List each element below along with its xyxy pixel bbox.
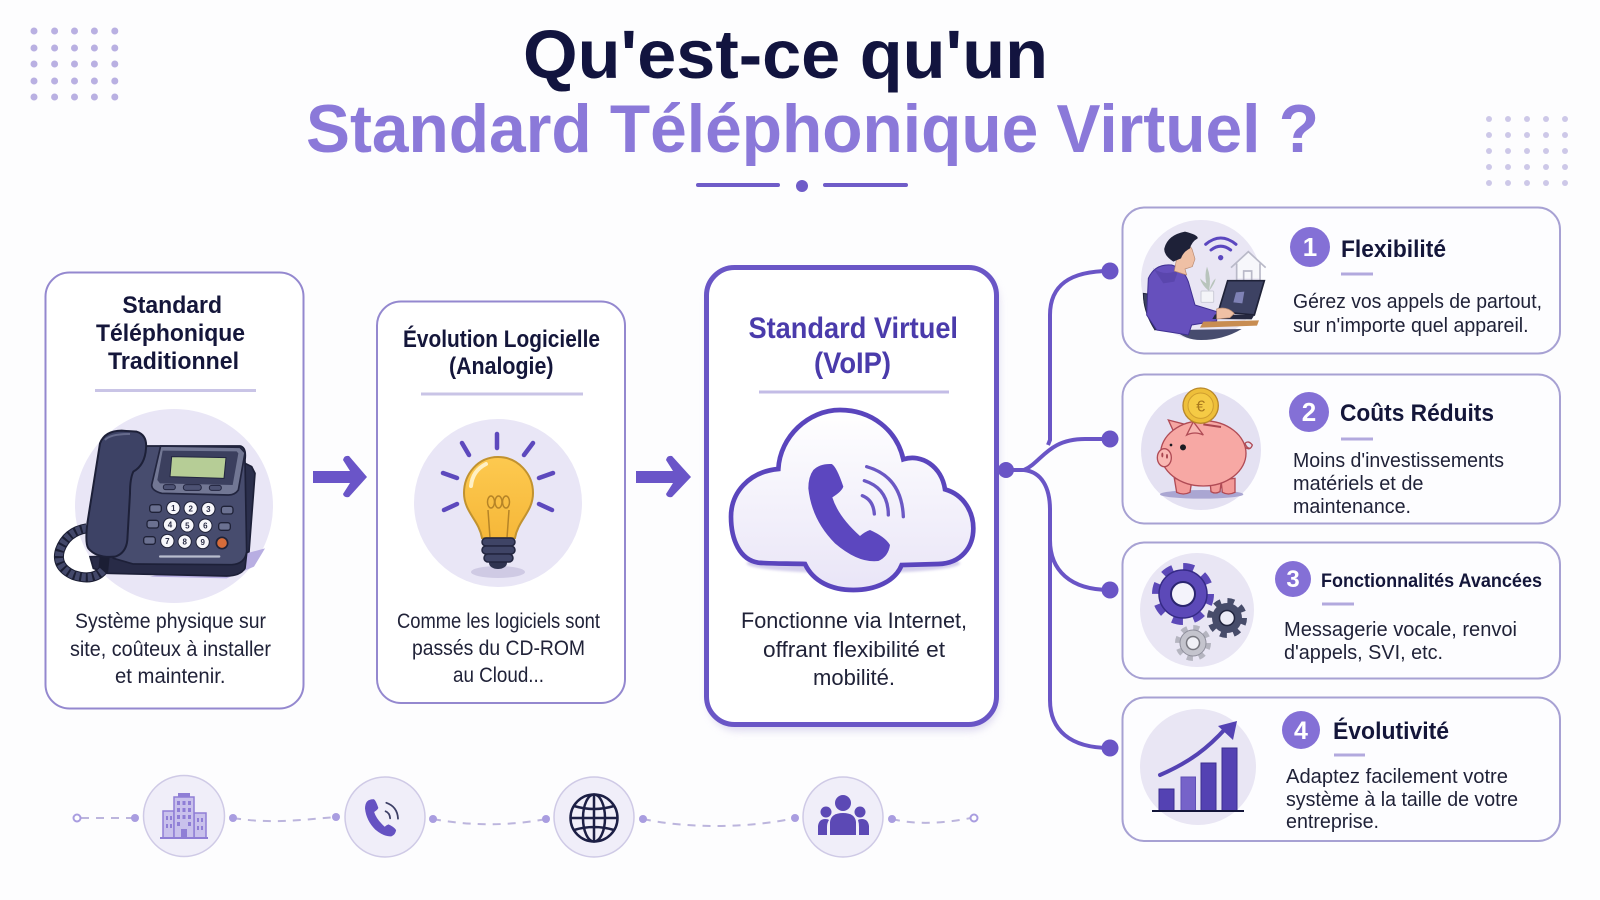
icon: globe	[554, 777, 634, 857]
panel body text: Fonctionne via Internet,	[741, 608, 967, 633]
card text: Adaptez facilement votre	[1286, 766, 1508, 788]
panel body text: et maintenir.	[115, 665, 226, 688]
panel heading: Standard	[122, 292, 222, 319]
panel body text	[70, 610, 271, 688]
panel body text: au Cloud...	[453, 664, 544, 687]
icon: desk phone	[59, 409, 273, 603]
card 3: fonctionnalites avancees	[1122, 542, 1560, 678]
number badge 4: 4	[1294, 717, 1308, 745]
icon: desk phone: 3	[206, 505, 211, 514]
bottom icon chain: dashed links	[74, 813, 978, 826]
panel body text: mobilité.	[813, 665, 895, 690]
card text	[1286, 766, 1518, 833]
title divider	[696, 180, 908, 192]
icon: people	[803, 777, 883, 857]
icon: growth chart	[1140, 709, 1256, 825]
icon: light bulb	[414, 419, 582, 587]
card text: Gérez vos appels de partout,	[1293, 291, 1542, 313]
card text: maintenance.	[1293, 496, 1411, 518]
card text	[1284, 619, 1517, 664]
icon: phone	[345, 777, 425, 857]
card text: d'appels, SVI, etc.	[1284, 642, 1443, 664]
icon: remote worker	[1141, 220, 1266, 340]
panel body text: Système physique sur	[75, 610, 266, 633]
panel body text: offrant flexibilité et	[763, 637, 946, 662]
panel heading	[96, 292, 245, 375]
decorative dots: top left	[30, 28, 118, 100]
card text: entreprise.	[1286, 811, 1379, 833]
arrow: logiciel to virtuel	[636, 456, 691, 497]
number badge 3: 3	[1286, 566, 1300, 593]
icon: desk phone: 4	[168, 521, 173, 530]
number badge 4	[1282, 711, 1320, 749]
card 4: evolutivite	[1122, 698, 1560, 841]
card heading: Coûts Réduits	[1340, 400, 1494, 427]
arrow: traditionnel to logiciel	[313, 456, 367, 497]
icon: piggy bank: €	[1196, 398, 1205, 415]
panel body text: site, coûteux à installer	[70, 638, 271, 661]
card heading: Flexibilité	[1341, 236, 1446, 263]
icon: desk phone: 7	[165, 537, 170, 546]
icon: desk phone: 9	[200, 538, 205, 547]
title: Standard Téléphonique Virtuel ?	[306, 91, 1319, 167]
number badge 1: 1	[1303, 232, 1317, 262]
panel: standard traditionnel	[46, 272, 304, 708]
card text: Messagerie vocale, renvoi	[1284, 619, 1517, 641]
panel heading: Traditionnel	[108, 348, 239, 375]
card heading: Évolutivité	[1333, 717, 1449, 745]
panel heading: (VoIP)	[814, 347, 891, 380]
card text: sur n'importe quel appareil.	[1293, 315, 1529, 337]
icon: gears	[1140, 553, 1254, 667]
icon: desk phone: 5	[185, 521, 190, 530]
panel heading: Évolution Logicielle	[403, 325, 600, 353]
card text	[1293, 450, 1504, 518]
number badge 1	[1290, 227, 1330, 267]
icon: desk phone: 1	[171, 504, 176, 513]
card 1: flexibilite	[1122, 208, 1560, 354]
card text: matériels et de	[1293, 473, 1424, 495]
panel heading: (Analogie)	[449, 353, 554, 380]
icon: desk phone: 8	[182, 538, 187, 547]
title	[306, 16, 1319, 167]
connector: branches to advantages	[998, 262, 1118, 756]
panel: evolution logicielle	[377, 302, 625, 703]
title: Qu'est-ce qu'un	[523, 16, 1048, 93]
panel body text	[397, 610, 600, 687]
icon: desk phone: 6	[203, 522, 208, 531]
icon: desk phone: 2	[188, 504, 193, 513]
number badge 3	[1275, 561, 1311, 597]
panel heading	[748, 312, 958, 380]
card heading: Fonctionnalités Avancées	[1321, 570, 1542, 592]
panel heading: Standard Virtuel	[748, 312, 958, 345]
panel heading: Téléphonique	[96, 320, 245, 347]
number badge 2	[1289, 392, 1329, 432]
card 2: couts reduits	[1122, 374, 1560, 524]
panel body text: passés du CD-ROM	[412, 637, 585, 660]
card text	[1293, 291, 1542, 337]
panel: standard virtuel	[706, 268, 999, 731]
card text: système à la taille de votre	[1286, 789, 1518, 811]
card text: Moins d'investissements	[1293, 450, 1504, 472]
panel body text: Comme les logiciels sont	[397, 610, 600, 633]
number badge 2: 2	[1302, 397, 1316, 427]
icon: building	[144, 776, 224, 856]
panel heading	[403, 325, 600, 380]
panel body text	[741, 608, 967, 690]
icon: cloud phone	[731, 410, 973, 590]
decorative dots: top right	[1486, 116, 1568, 186]
icon: piggy bank	[1141, 388, 1261, 510]
